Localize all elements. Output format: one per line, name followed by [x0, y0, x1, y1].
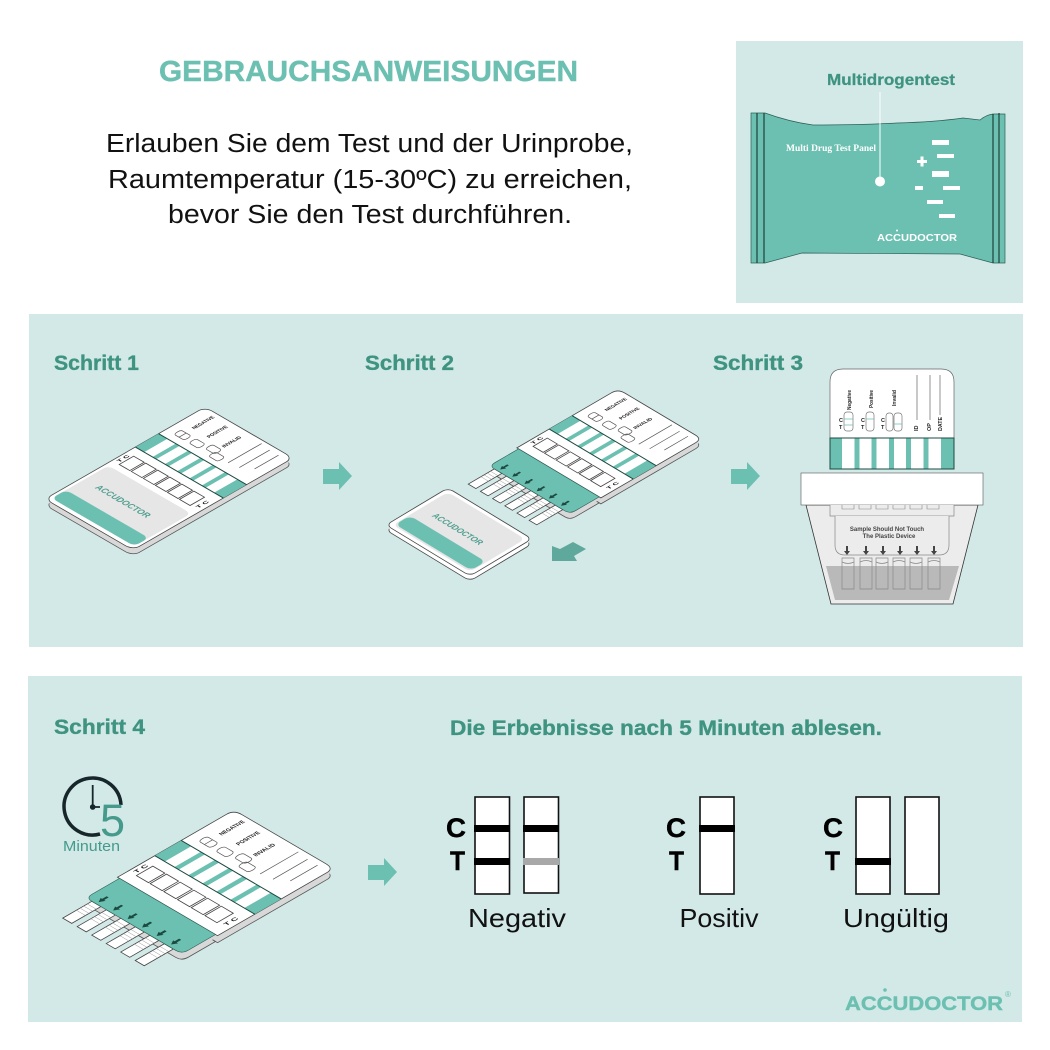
- result: positiv: Positiv: [680, 903, 758, 933]
- result: positiv: T: [669, 846, 684, 876]
- result: ungueltig: Ungültig: [843, 903, 949, 933]
- panel: test package: [736, 41, 1023, 303]
- arrow: step 1 to step 2: [323, 462, 352, 490]
- intro text block: Erlauben Sie dem Test und der Urinprobe,: [106, 130, 633, 158]
- result: ungueltig: [823, 797, 949, 933]
- illustration: removed foil lid: ACCUDOCTOR: [429, 512, 486, 547]
- foil pouch: Multi Drug Test Panel: [786, 144, 876, 154]
- intro text block: [106, 130, 633, 229]
- cup: [806, 505, 978, 604]
- heading: read results: Die Erbebnisse nach 5 Minuten ablesen.: [450, 717, 882, 740]
- illustration: sealed test card: NEGATIVE: [190, 415, 216, 430]
- panel: steps 1 to 3: [29, 314, 1023, 647]
- illustration: test dipped in urin cup: [801, 369, 983, 604]
- illustration: opened test card: INVALID: [632, 417, 654, 430]
- illustration: test dipped in urin cup: C: [881, 418, 885, 424]
- result: negativ: C: [446, 813, 466, 843]
- arrow: step 4 to results: [368, 858, 397, 886]
- heading: step 2: Schritt 2: [365, 352, 454, 375]
- illustration: sealed test card: [45, 407, 293, 556]
- logo: accudoctor: ACCUDOCTOR: [845, 994, 1003, 1015]
- illustration: test card with strips: INVALID: [251, 842, 277, 857]
- result: negativ: T: [450, 846, 465, 876]
- icon: 5 minute clock: 5: [100, 795, 125, 846]
- illustration: test dipped in urin cup: C: [861, 418, 865, 424]
- illustration: removed foil lid: [386, 488, 532, 581]
- heading: step 3: Schritt 3: [713, 352, 803, 375]
- intro text block: bevor Sie den Test durchführen.: [168, 201, 572, 229]
- illustration: sealed test card: INVALID: [220, 435, 243, 448]
- illustration: sealed test card: POSITIVE: [205, 425, 230, 439]
- logo: accudoctor: [845, 988, 1011, 1015]
- illustration: test dipped in urin cup: Negative: [847, 390, 853, 410]
- illustration: test dipped in urin cup: Invalid: [892, 390, 898, 406]
- panel: step 4: [28, 676, 1022, 1022]
- result: negativ: Negativ: [468, 903, 566, 933]
- illustration: opened test card: T C: [529, 435, 546, 445]
- illustration: test dipped in urin cup: ID: [914, 425, 920, 431]
- logo: accudoctor: ®: [1005, 990, 1011, 999]
- illustration: test card with strips: [55, 810, 334, 972]
- illustration: opened test card: [462, 389, 702, 530]
- heading: step 1: Schritt 1: [54, 352, 139, 375]
- illustration: test card with strips: T C: [132, 863, 150, 874]
- illustration: test dipped in urin cup: DATE: [938, 417, 944, 431]
- result: positiv: [666, 797, 758, 933]
- illustration: test dipped in urin cup: Positive: [869, 390, 875, 408]
- package label: Multidrogentest: [827, 72, 955, 89]
- result: ungueltig: C: [823, 813, 843, 843]
- illustration: test dipped in urin cup: The Plastic Device: [863, 534, 916, 540]
- icon: 5 minute clock: [63, 778, 125, 855]
- illustration: test card with strips: T C: [222, 916, 240, 927]
- arrow: remove lid: [552, 542, 586, 561]
- illustration: test dipped in urin cup: T: [881, 425, 885, 431]
- illustration: opened test card: POSITIVE: [617, 406, 641, 420]
- device head: [830, 369, 954, 469]
- illustration: opened test card: T C: [605, 480, 621, 490]
- illustration: test dipped in urin cup: T: [861, 425, 865, 431]
- illustration: test dipped in urin cup: OP: [927, 423, 933, 431]
- illustration: test dipped in urin cup: T: [839, 425, 843, 431]
- heading: step 4: Schritt 4: [54, 716, 145, 739]
- icon: 5 minute clock: Minuten: [63, 838, 120, 855]
- illustration: opened test card: NEGATIVE: [603, 397, 629, 412]
- illustration: sealed test card: T C: [194, 499, 211, 509]
- title: GEBRAUCHSANWEISUNGEN: [159, 56, 578, 88]
- result: negativ: [446, 797, 566, 933]
- arrow: step 2 to step 3: [731, 462, 760, 490]
- illustration: sealed test card: ACCUDOCTOR: [92, 484, 154, 520]
- illustration: test dipped in urin cup: Sample Should Not Touch: [850, 527, 924, 533]
- illustration: test card with strips: POSITIVE: [234, 830, 262, 846]
- illustration: sealed test card: T C: [115, 453, 132, 463]
- foil pouch: [751, 92, 1005, 263]
- foil pouch: ACCUDOCTOR: [877, 233, 958, 244]
- result: ungueltig: T: [825, 846, 840, 876]
- illustration: test card with strips: NEGATIVE: [217, 819, 247, 836]
- collar: [801, 473, 983, 505]
- illustration: test dipped in urin cup: C: [839, 418, 843, 424]
- intro text block: Raumtemperatur (15-30ºC) zu erreichen,: [108, 166, 632, 194]
- result: positiv: C: [666, 813, 686, 843]
